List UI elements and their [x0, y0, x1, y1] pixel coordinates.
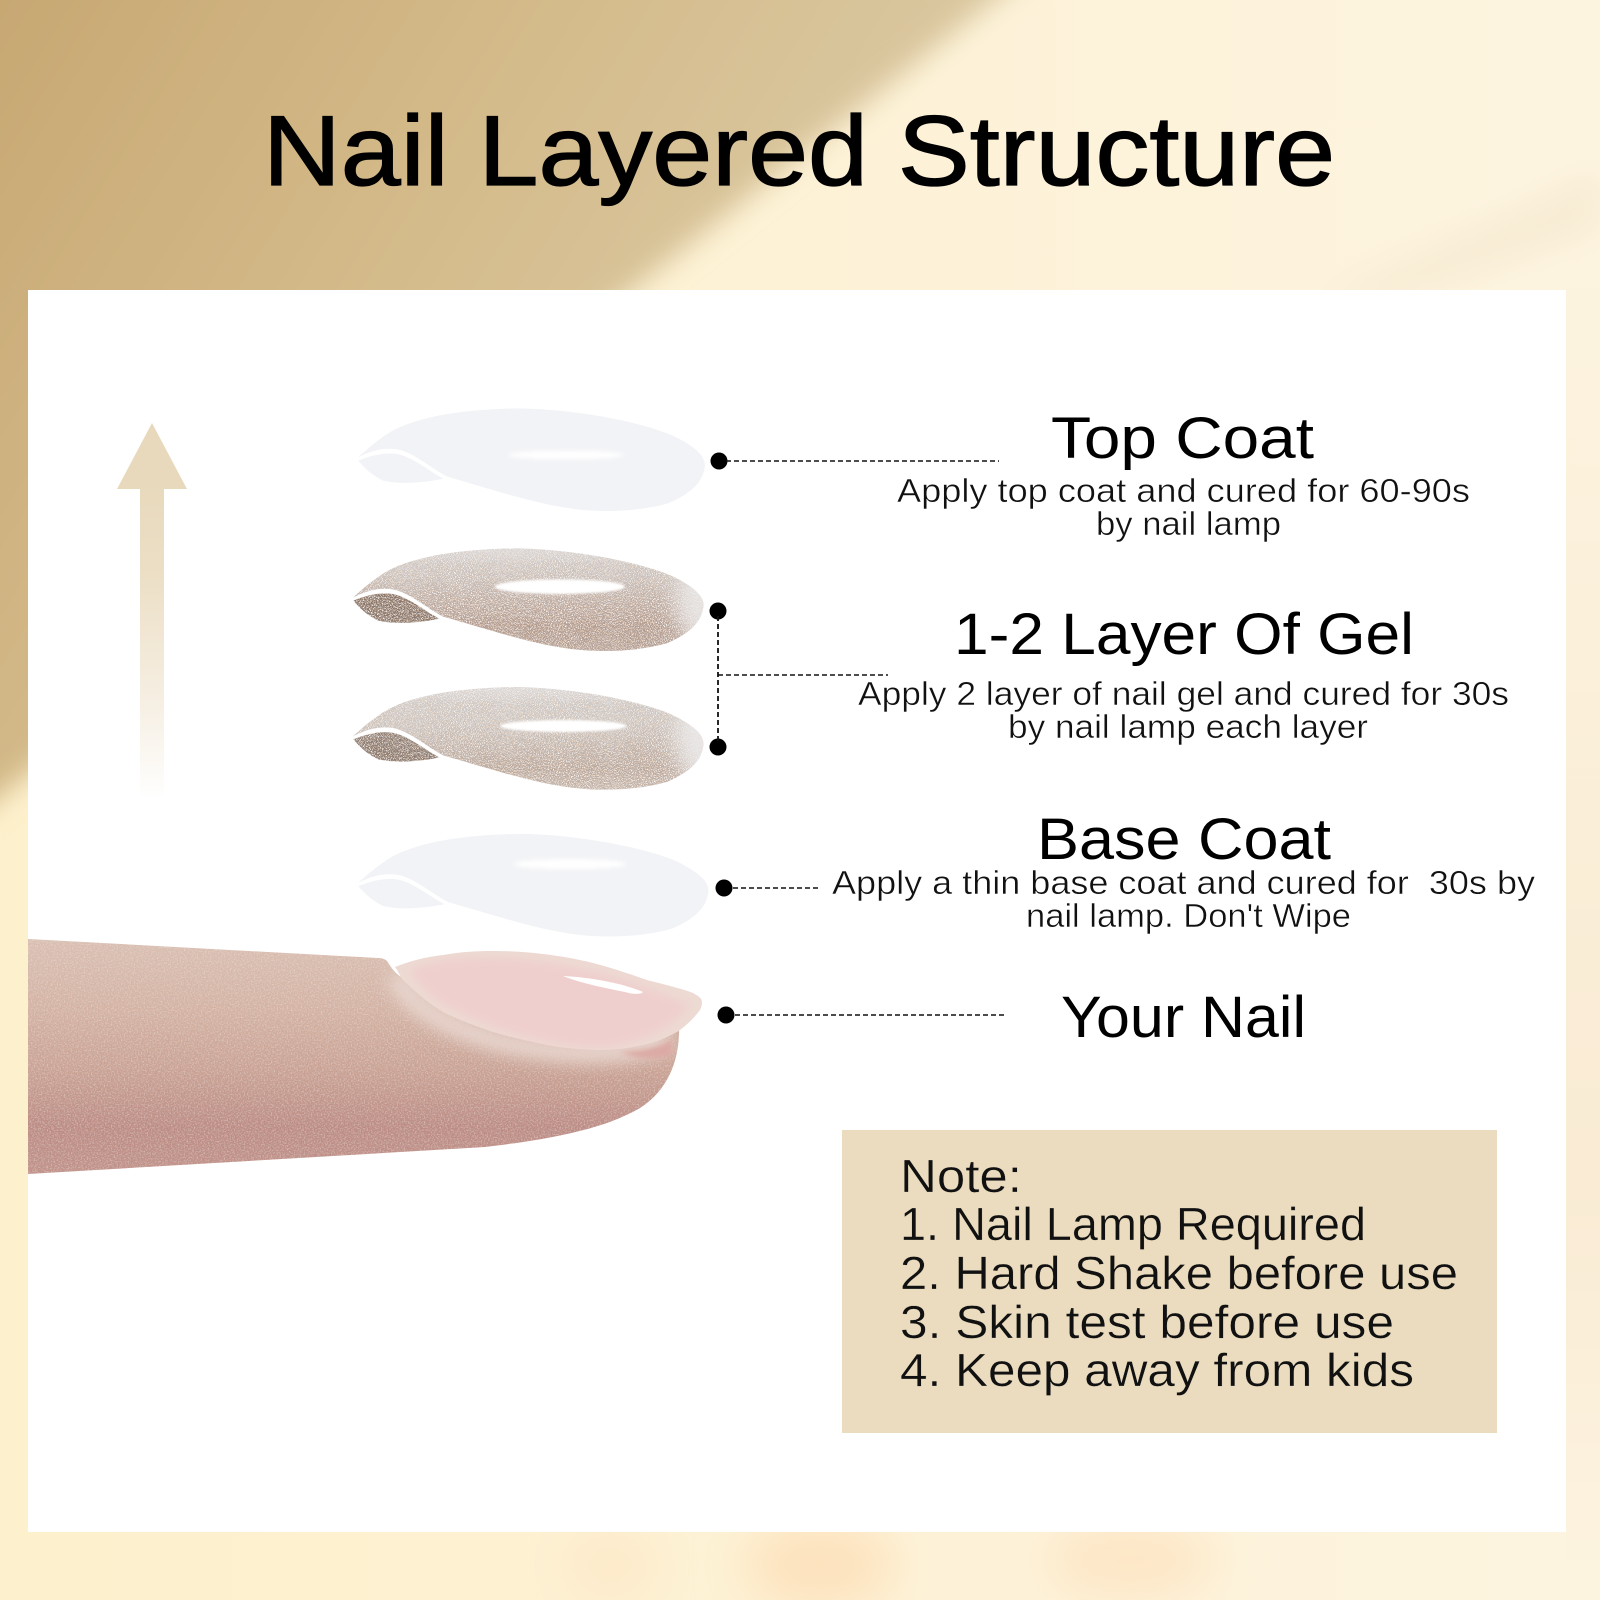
- arrow pointing upward: [117, 423, 187, 800]
- note box: 1. Nail Lamp Required: [900, 1198, 1366, 1250]
- title: Nail Layered Structure: [263, 95, 1335, 206]
- label: gel layers: [858, 602, 1509, 745]
- label: your nail: Your Nail: [1061, 985, 1306, 1050]
- layer: base coat nail: [358, 834, 708, 936]
- label: base coat: Base Coat: [1037, 807, 1331, 872]
- label: top coat: [897, 406, 1470, 542]
- finger: [28, 939, 679, 1174]
- layer: gel nail upper: [353, 548, 704, 651]
- label: base coat: [832, 807, 1536, 934]
- label: top coat: by nail lamp: [1096, 505, 1281, 542]
- label: top coat: Apply top coat and cured for 60-90s: [897, 472, 1470, 509]
- label: gel layers: 1-2 Layer Of Gel: [954, 602, 1414, 667]
- nail highlight: [563, 976, 643, 994]
- white content panel: [28, 290, 1566, 1532]
- leader: gel bracket: [710, 602, 888, 756]
- layer: top coat nail: [358, 408, 705, 511]
- leader: top coat: [710, 452, 999, 470]
- note box: 3. Skin test before use: [900, 1296, 1394, 1348]
- note box: 4. Keep away from kids: [900, 1344, 1414, 1396]
- finger with natural nail: [28, 939, 710, 1174]
- leader: your nail: [718, 1006, 1004, 1024]
- layer: gel nail lower: [353, 687, 704, 790]
- note box: [842, 1130, 1497, 1433]
- label: top coat: Top Coat: [1051, 406, 1314, 471]
- natural nail: [395, 951, 702, 1050]
- label: gel layers: Apply 2 layer of nail gel and cured for 30s: [858, 675, 1509, 712]
- label: gel layers: by nail lamp each layer: [1008, 708, 1368, 745]
- label: base coat: Apply a thin base coat and cured for 30s by: [832, 864, 1536, 901]
- note box: 2. Hard Shake before use: [900, 1247, 1458, 1299]
- note box: Note:: [900, 1150, 1022, 1202]
- cuticle sheen: [395, 975, 672, 1058]
- leader: base coat: [716, 880, 818, 896]
- label: base coat: nail lamp. Don't Wipe: [1026, 897, 1351, 934]
